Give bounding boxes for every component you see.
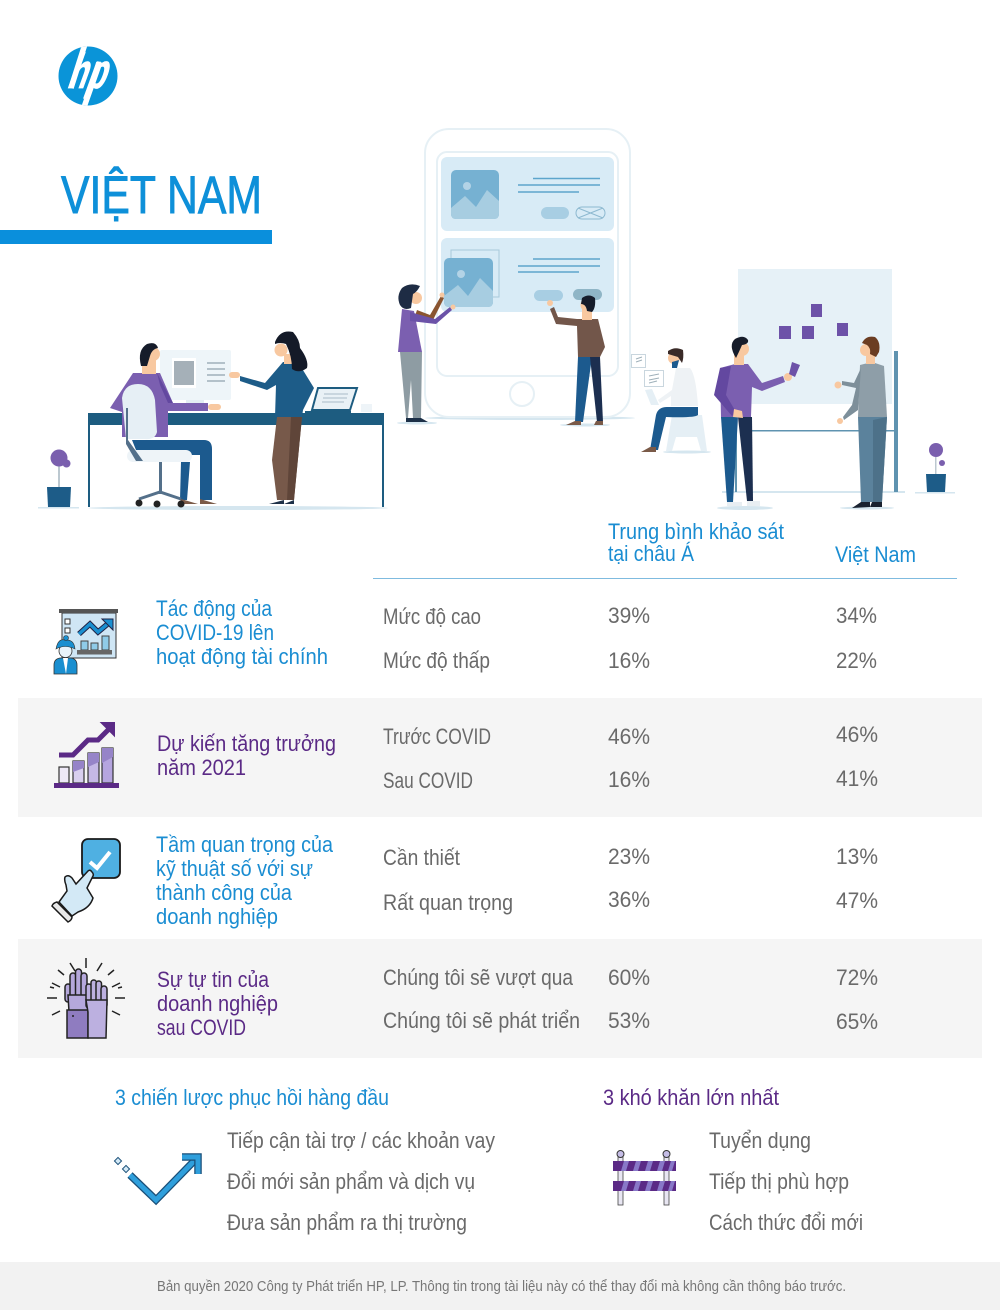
label: [156, 832, 334, 929]
icon: presenter with chart: [54, 609, 118, 674]
stool: [666, 415, 707, 451]
monitor: [160, 350, 231, 406]
icon: upward check arrow: [114, 1157, 198, 1200]
values: 72%: [836, 965, 878, 990]
table header: Trung bình khảo sát: [608, 519, 784, 544]
list: Đưa sản phẩm ra thị trường: [227, 1210, 467, 1235]
sticky notes: [779, 304, 848, 339]
illustration: desk scene: [38, 331, 388, 510]
icon: raised hands: [47, 958, 125, 1038]
values: Sau COVID: [383, 768, 473, 793]
title: VIỆT NAM: [61, 166, 262, 225]
list: Tiếp cận tài trợ / các khoản vay: [227, 1128, 495, 1153]
values: Cần thiết: [383, 845, 460, 870]
right hand: [86, 980, 107, 1038]
values: [383, 603, 877, 673]
label: hoạt động tài chính: [156, 644, 328, 669]
label: [157, 967, 278, 1040]
title: [0, 166, 272, 244]
label: Tác động của: [156, 596, 273, 621]
table header: [373, 519, 957, 579]
row: expected growth: [54, 722, 878, 793]
woman at tablet: [397, 284, 456, 424]
values: 16%: [608, 767, 650, 792]
values: Chúng tôi sẽ vượt qua: [383, 965, 574, 990]
values: Mức độ cao: [383, 604, 481, 629]
values: 34%: [836, 603, 877, 628]
illustration: seated man with laptop: [632, 348, 711, 454]
plant: [38, 450, 79, 508]
values: 65%: [836, 1009, 878, 1034]
standing woman: [229, 331, 314, 504]
values: 16%: [608, 648, 650, 673]
values: 53%: [608, 1008, 650, 1033]
man with note: [714, 337, 800, 510]
plant: [915, 443, 955, 494]
left hand: [65, 969, 90, 1012]
list: Tiếp thị phù hợp: [709, 1169, 849, 1194]
seated man: [110, 343, 221, 508]
values: Rất quan trọng: [383, 890, 513, 915]
label: doanh nghiệp: [157, 991, 278, 1016]
man at tablet: [547, 296, 610, 426]
values: 39%: [608, 603, 650, 628]
label: năm 2021: [157, 755, 246, 780]
values: [383, 722, 878, 793]
icon: growth bars: [54, 723, 119, 788]
heading: 3 chiến lược phục hồi hàng đầu: [115, 1085, 389, 1110]
documents: [632, 354, 664, 386]
icon: HP logo: [58, 46, 118, 106]
illustration: whiteboard with two men: [714, 269, 955, 510]
values: [383, 844, 878, 915]
row: importance of digital: [52, 832, 878, 929]
label: doanh nghiệp: [156, 904, 278, 929]
panel: biggest challenges: [603, 1085, 863, 1235]
label: sau COVID: [157, 1015, 246, 1040]
label: thành công của: [156, 880, 293, 905]
footer: Bản quyền 2020 Công ty Phát triển HP, LP. Thông tin trong tài liệu này có thể thay đổi mà không cần thông báo trước.: [157, 1278, 846, 1295]
heading: 3 khó khăn lớn nhất: [603, 1085, 779, 1110]
row: financial impact: [54, 596, 877, 674]
table header: Việt Nam: [835, 542, 916, 567]
footer: [0, 1262, 1000, 1310]
values: Chúng tôi sẽ phát triển: [383, 1008, 580, 1033]
values: [383, 965, 878, 1034]
label: Sự tự tin của: [157, 967, 270, 992]
laptop: [305, 388, 372, 413]
row: business confidence: [47, 958, 878, 1040]
list: [227, 1128, 495, 1235]
panel: top recovery strategies: [114, 1085, 495, 1235]
illustration: tablet with people: [397, 129, 635, 426]
man: [641, 348, 698, 452]
values: 46%: [608, 724, 650, 749]
list: Đổi mới sản phẩm và dịch vụ: [227, 1169, 475, 1194]
values: 13%: [836, 844, 878, 869]
label: [157, 731, 336, 780]
tablet frame: [425, 129, 630, 417]
values: Mức độ thấp: [383, 648, 490, 673]
list: Tuyển dụng: [709, 1128, 811, 1153]
values: 47%: [836, 888, 878, 913]
list: [709, 1128, 863, 1235]
label: Tầm quan trọng của: [156, 832, 334, 857]
values: Trước COVID: [383, 724, 491, 749]
icon: hand tapping check box: [52, 839, 120, 922]
icon: road barrier: [613, 1150, 676, 1205]
values: 46%: [836, 722, 878, 747]
label: Dự kiến tăng trưởng: [157, 731, 336, 756]
label: [156, 596, 328, 669]
card 1: [441, 157, 614, 231]
table header: tại châu Á: [608, 541, 694, 566]
list: Cách thức đổi mới: [709, 1210, 863, 1235]
label: COVID-19 lên: [156, 620, 274, 645]
values: 23%: [608, 844, 650, 869]
values: 41%: [836, 766, 878, 791]
whiteboard: [735, 269, 898, 492]
card 2: [441, 238, 614, 312]
label: kỹ thuật số với sự: [156, 856, 313, 881]
man in grey: [834, 337, 894, 510]
values: 36%: [608, 887, 650, 912]
icon: HP logo: hp: [62, 43, 120, 99]
values: 60%: [608, 965, 650, 990]
values: 22%: [836, 648, 877, 673]
desk: [88, 413, 384, 507]
